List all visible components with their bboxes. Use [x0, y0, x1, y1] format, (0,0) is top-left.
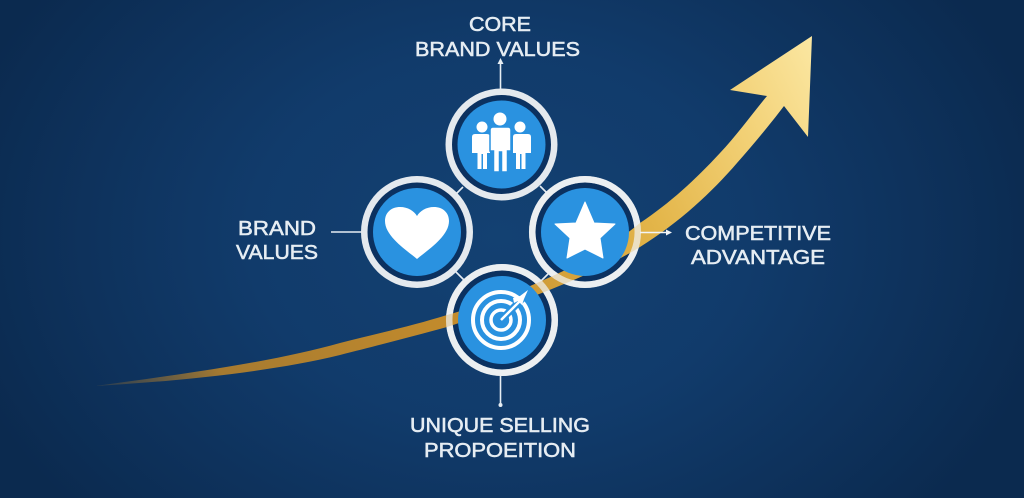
node: competitive advantage — [541, 188, 629, 276]
label: unique selling proposition: UNIQUE SELLING — [410, 414, 590, 437]
node: brand values — [373, 188, 461, 276]
growth arrow — [95, 36, 812, 386]
icon: heart — [385, 207, 449, 259]
label: unique selling proposition: PROPOEITION — [424, 439, 576, 462]
icon: target — [473, 291, 530, 348]
icon: dart tip — [513, 290, 528, 305]
node: core brand values — [458, 100, 546, 188]
icon: star — [555, 202, 615, 258]
label: core brand values: CORE — [469, 13, 531, 36]
label: brand values: BRAND — [238, 217, 316, 240]
label: competitive advantage: COMPETITIVE — [685, 222, 831, 245]
icon: people — [472, 112, 531, 172]
label: core brand values: BRAND VALUES — [415, 38, 580, 61]
ring bases — [361, 88, 641, 376]
label: brand values: VALUES — [236, 241, 318, 264]
competitive advantage connector — [640, 230, 672, 236]
connector lines — [331, 58, 548, 407]
node: unique selling proposition — [458, 276, 546, 364]
label: competitive advantage: ADVANTAGE — [691, 246, 825, 269]
translucent ring overlays — [449, 179, 638, 373]
